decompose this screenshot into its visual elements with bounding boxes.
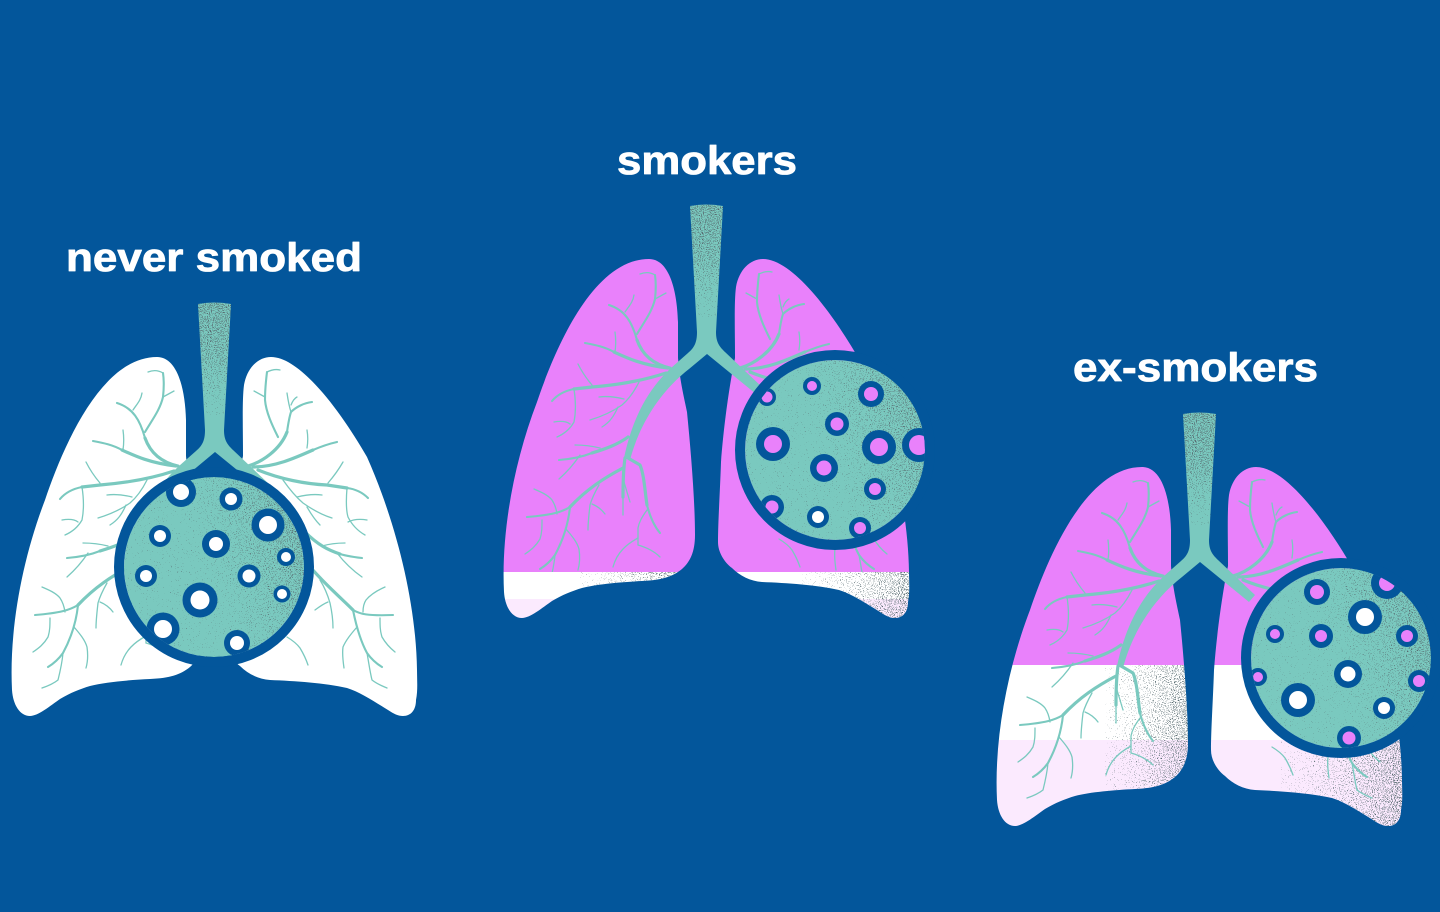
bronchial branches [33, 370, 395, 688]
magnified alveoli circle [740, 355, 936, 545]
magnified alveoli circle [1246, 563, 1436, 753]
trachea with grain [1117, 410, 1255, 668]
lungs: ex-smokers [985, 410, 1436, 830]
lungs: never smoked [12, 300, 417, 716]
heading: smokers: smokers [617, 139, 797, 183]
bronchial branches [1018, 480, 1380, 798]
trachea with grain [150, 302, 268, 504]
heading: ex-smokers: ex-smokers [1073, 346, 1318, 390]
trachea with grain [624, 202, 762, 460]
heading: never smoked: never smoked [66, 236, 362, 280]
lung lobes with colour bands [504, 259, 910, 618]
white lung lobes [12, 357, 417, 716]
magnified alveoli circle [119, 472, 309, 662]
lungs: smokers [492, 202, 936, 629]
lung lobes with colour bands [996, 467, 1402, 826]
bronchial branches [525, 272, 887, 590]
